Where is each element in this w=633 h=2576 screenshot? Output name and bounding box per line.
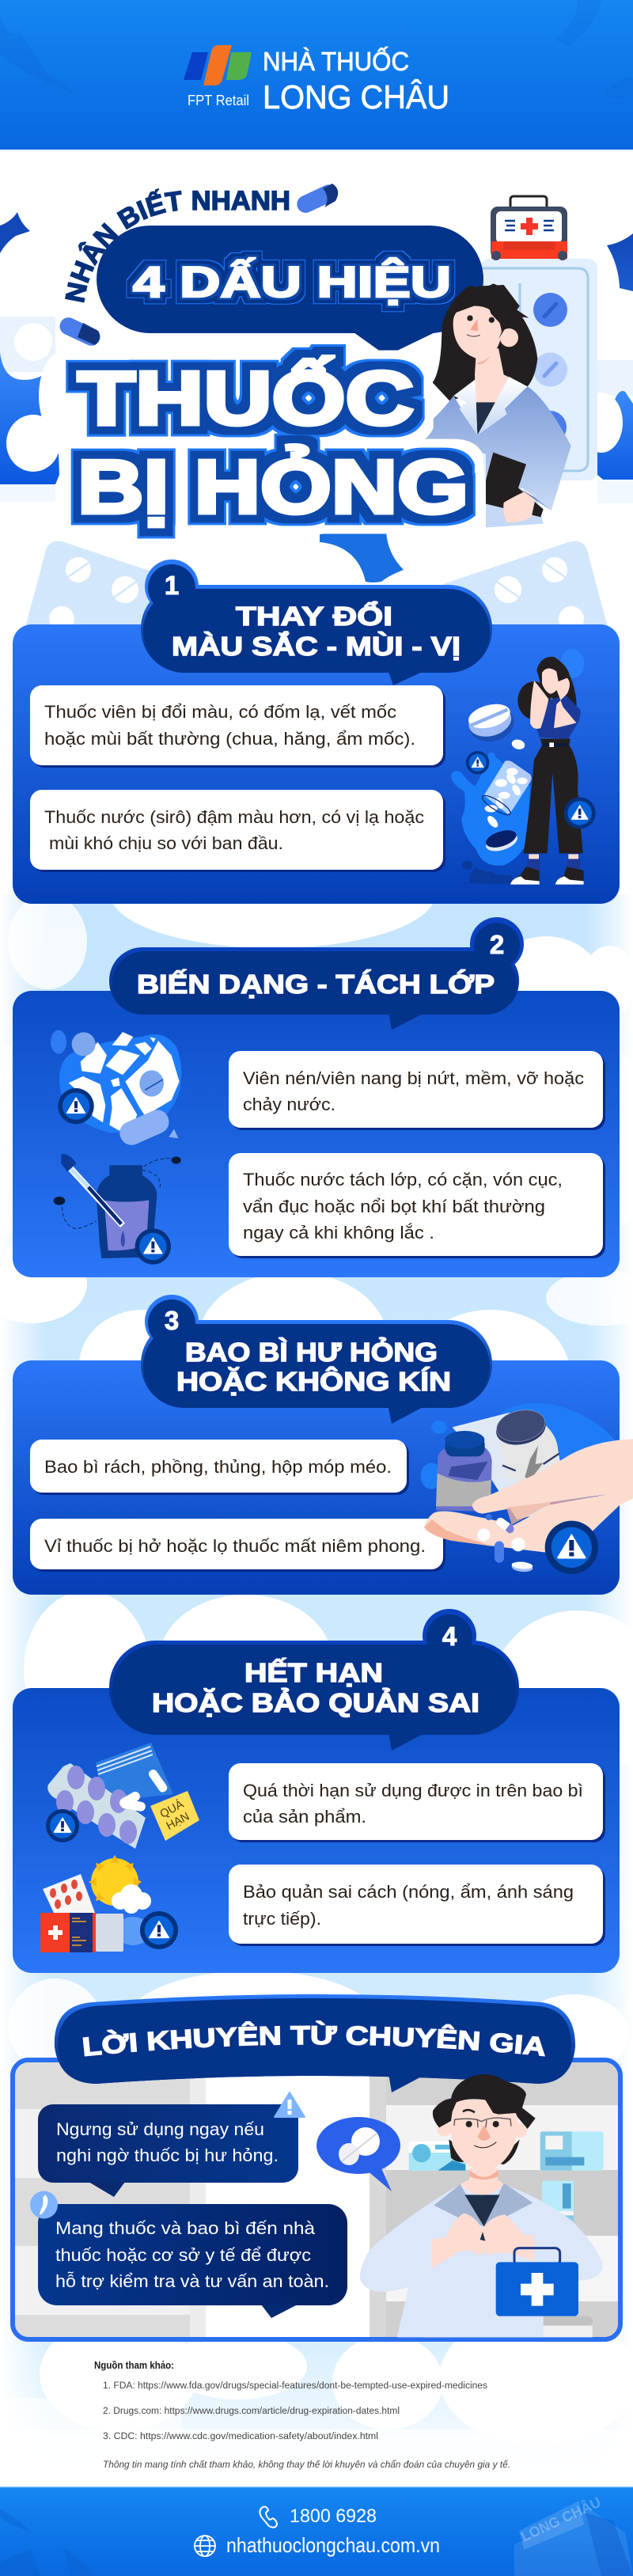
references — [94, 2359, 510, 2470]
section 3 heading pill: BAO BÌ HƯ HỎNG — [185, 1337, 438, 1367]
text card 4b — [229, 1865, 605, 1946]
section 1 heading pill: MÀU SẮC - MÙI - VỊ — [172, 632, 461, 661]
section 1 heading pill — [141, 560, 492, 685]
text card 2a — [229, 1051, 605, 1130]
illustration: expired medicines: HẠN — [165, 1810, 191, 1833]
text card 3b: Vỉ thuốc bị hở hoặc lọ thuốc mất niêm phong. — [44, 1536, 426, 1556]
text card 3a — [30, 1440, 409, 1495]
section 3 heading pill: HOẶC KHÔNG KÍN — [176, 1366, 451, 1396]
watermark: store building — [514, 2494, 633, 2576]
top clouds — [0, 212, 633, 503]
text card 3a: Bao bì rách, phồng, thủng, hộp móp méo. — [44, 1457, 392, 1477]
text card 1a — [30, 685, 445, 768]
section 4 heading pill: HOẶC BẢO QUẢN SAI — [152, 1688, 479, 1717]
section 4 heading pill: 4 — [442, 1622, 457, 1651]
footer: nhathuoclongchau.com.vn — [226, 2533, 440, 2557]
text card 4a: Quá thời hạn sử dụng được in trên bao bì — [243, 1781, 583, 1800]
section 2 heading pill — [109, 917, 524, 1030]
logo: pharmacy name: NHÀ THUỐC — [263, 46, 409, 76]
decorative blister packs — [24, 532, 609, 633]
text card 4a — [229, 1763, 605, 1842]
text card 1b: Thuốc nước (sirô) đậm màu hơn, có vị lạ hoặc — [44, 807, 424, 827]
heading: 4 dấu hiệu: 4 DẤU HIỆU — [133, 257, 451, 306]
logo: FPT Retail — [184, 45, 252, 108]
illustration: wrong storage — [40, 1855, 178, 1952]
section 3 heading pill — [141, 1295, 492, 1424]
text card 4b: trực tiếp). — [243, 1909, 321, 1929]
text card 1b — [30, 790, 445, 872]
illustration: cracked pills — [51, 1030, 181, 1265]
section 4 heading pill: HẾT HẠN — [244, 1658, 383, 1687]
references: Nguồn tham khảo: — [94, 2359, 174, 2371]
text card 1b: mùi khó chịu so với ban đầu. — [49, 833, 283, 853]
illustration: worried woman with spilled pills — [451, 649, 596, 885]
logo: pharmacy name: LONG CHÂU — [263, 78, 449, 116]
callout: stop using — [38, 2092, 305, 2197]
panel: expert advice scene — [13, 2060, 620, 2339]
illustration: expired medicines — [46, 1743, 199, 1849]
text card 4a: của sản phẩm. — [243, 1807, 366, 1827]
illustration: pharmacist woman — [404, 283, 571, 528]
heading: thuốc bị hỏng: THUỐC — [78, 355, 414, 441]
heading: expert advice: LỜI KHUYÊN TỪ CHUYÊN GIA — [82, 2020, 546, 2058]
text card 2b — [229, 1153, 605, 1258]
references: 3. CDC: https://www.cdc.gov/medication-safety/about/index.html — [103, 2432, 378, 2441]
illustration: blister behind pharmacist — [480, 259, 597, 480]
curved heading: nhận biết nhanh: NHẬN BIẾT NHANH — [65, 188, 290, 302]
panel: section 1 — [13, 560, 620, 904]
pill icon: left — [57, 315, 103, 348]
callout: bring medicine to pharmacy: thuốc hoặc cơ sở y tế để được — [55, 2245, 311, 2265]
section 2 heading pill: 2 — [490, 930, 504, 959]
callout: stop using: Ngưng sử dụng ngay nếu — [56, 2119, 264, 2139]
references: Thông tin mang tính chất tham khảo, không thay thế lời khuyên và chẩn đoán của chuyên gia y tế. — [103, 2460, 510, 2470]
references: 2. Drugs.com: https://www.drugs.com/article/drug-expiration-dates.html — [103, 2407, 400, 2416]
section 1 heading pill: THAY ĐỔI — [236, 601, 392, 631]
text card 2b: Thuốc nước tách lớp, có cặn, vón cục, — [243, 1170, 563, 1189]
section 2 heading pill: BIẾN DẠNG - TÁCH LỚP — [137, 969, 495, 999]
text card 2a: chảy nước. — [243, 1095, 335, 1114]
heading: expert advice — [54, 1994, 575, 2092]
references: 1. FDA: https://www.fda.gov/drugs/special-features/dont-be-tempted-use-expired-medicines — [103, 2381, 487, 2391]
text card 3b — [30, 1519, 445, 1572]
logo: FPT Retail: FPT Retail — [188, 93, 249, 108]
section 3 heading pill: 3 — [165, 1306, 179, 1335]
callout: bring medicine to pharmacy — [30, 2191, 347, 2318]
speech bubble behind subtitle — [97, 226, 483, 352]
callout: bring medicine to pharmacy: hỗ trợ kiểm tra và tư vấn an toàn. — [55, 2271, 329, 2291]
pill icon: top — [294, 182, 340, 216]
text card 1a: hoặc mùi bất thường (chua, hăng, ẩm mốc). — [44, 729, 415, 749]
panel: section 3 — [13, 1295, 633, 1595]
text card 2a: Viên nén/viên nang bị nứt, mềm, vỡ hoặc — [243, 1068, 584, 1088]
watermark: store building: LONG CHÂU — [518, 2494, 603, 2545]
section 1 heading pill: 1 — [165, 571, 179, 600]
logo: pharmacy name — [263, 46, 449, 116]
icon: phone — [260, 2507, 277, 2528]
heading: thuốc bị hỏng — [78, 355, 468, 529]
illustration: hand holding damaged bottles — [421, 1403, 633, 1574]
callout: stop using: nghi ngờ thuốc bị hư hỏng. — [56, 2145, 279, 2165]
text card 2b: vẩn đục hoặc nổi bọt khí bất thường — [243, 1197, 545, 1216]
icon: warning triangle — [275, 2092, 305, 2117]
icon: pill speech bubble — [316, 2117, 400, 2191]
section 4 heading pill — [109, 1609, 519, 1751]
heading: thuốc bị hỏng: BỊ HỎNG — [78, 444, 468, 529]
panel: section 2 — [13, 917, 620, 1277]
footer — [0, 2487, 633, 2576]
illustration: expired medicines: QUÁ — [157, 1797, 186, 1821]
footer: 1800 6928 — [290, 2506, 377, 2527]
icon: globe — [195, 2536, 215, 2556]
text card 1a: Thuốc viên bị đổi màu, có đốm lạ, vết mốc — [44, 702, 396, 722]
illustration: doctor — [360, 2074, 604, 2337]
callout: bring medicine to pharmacy: Mang thuốc và bao bì đến nhà — [55, 2218, 316, 2238]
panel: section 4 — [13, 1609, 620, 1973]
icon: first aid kit — [491, 196, 567, 260]
header banner — [0, 0, 633, 150]
text card 4b: Bảo quản sai cách (nóng, ẩm, ánh sáng — [243, 1882, 574, 1902]
text card 2b: ngay cả khi không lắc . — [243, 1223, 434, 1242]
icon: phone — [30, 2191, 58, 2219]
